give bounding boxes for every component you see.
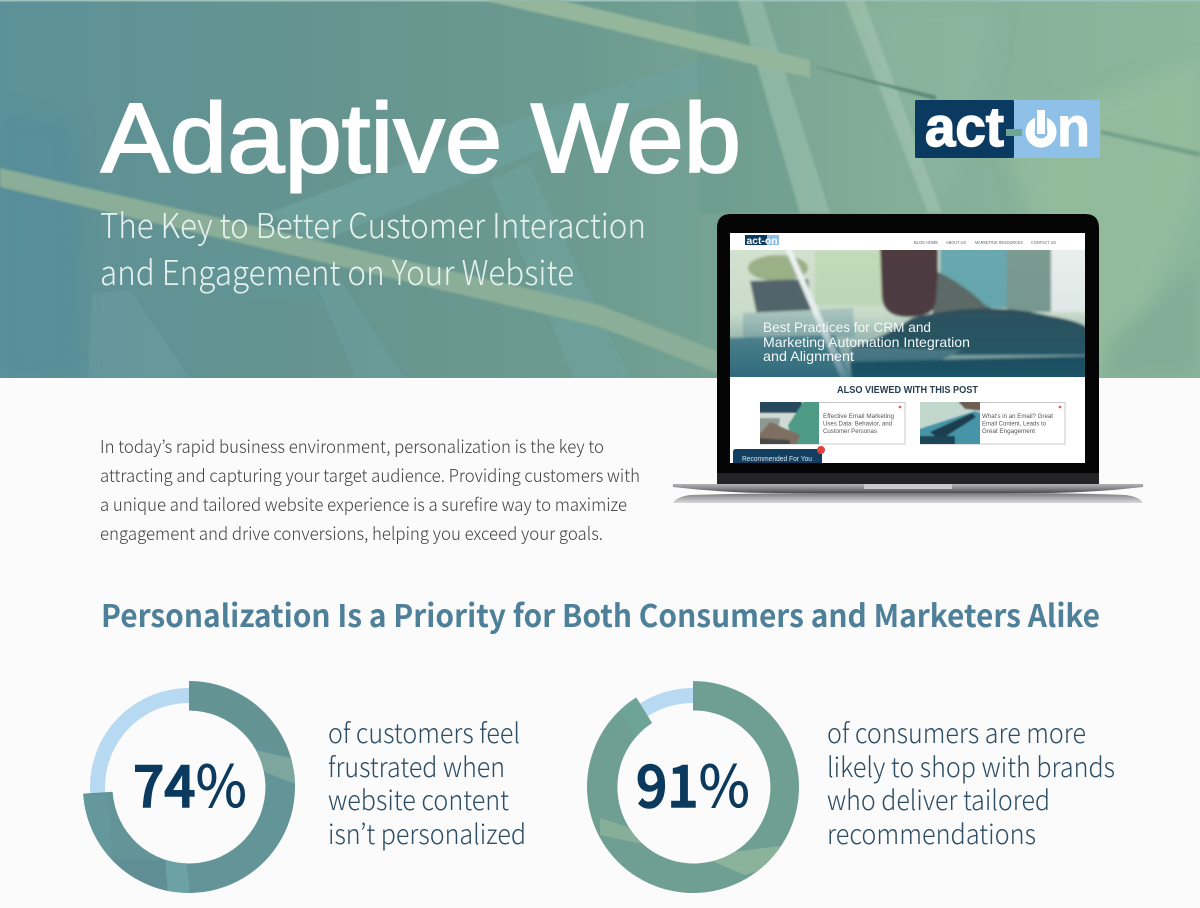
logo: act-on: n — [1057, 95, 1090, 158]
recommended tab: Recommended For You — [742, 456, 812, 463]
site nav bar: BLOG HOME — [914, 240, 938, 245]
article card 1: Effective Email Marketing — [823, 413, 894, 420]
site hero headline — [763, 319, 970, 364]
laptop mockup — [673, 214, 1143, 503]
stat text: consumers: of consumers are more — [827, 711, 1086, 751]
site content area: ALSO VIEWED WITH THIS POST — [837, 385, 978, 396]
site content area — [730, 377, 1085, 463]
intro paragraph: a unique and tailored website experience is a surefire way to maximize — [100, 492, 627, 517]
article card 1 — [760, 402, 906, 444]
intro paragraph: engagement and drive conversions, helping you exceed your goals. — [100, 521, 603, 546]
laptop reflection — [673, 493, 1143, 503]
stat text: customers — [328, 711, 526, 852]
site hero headline: Marketing Automation Integration — [763, 334, 970, 350]
stat text: customers: isn’t personalized — [328, 812, 526, 852]
title: Adaptive Web — [101, 83, 741, 193]
laptop body — [717, 214, 1099, 484]
stat text: consumers — [827, 711, 1115, 852]
intro paragraph — [100, 434, 640, 546]
site hero headline: and Alignment — [763, 348, 854, 364]
donut chart: 74% — [80, 678, 300, 898]
article card 2 — [920, 402, 1066, 444]
stat text: customers: of customers feel — [328, 711, 520, 751]
recommended tab — [733, 446, 825, 463]
article card 1: Uses Data: Behavior, and — [823, 420, 892, 428]
article card 1: Customer Personas — [823, 428, 878, 435]
article card 2: Email Content, Leads to — [982, 420, 1046, 428]
logo: act-on: act — [925, 95, 1004, 158]
stat value: 74%: 74% — [133, 740, 247, 824]
stat text: customers: frustrated when — [328, 745, 505, 785]
intro paragraph: attracting and capturing your target audience. Providing customers with — [100, 463, 640, 488]
subtitle: and Engagement on Your Website — [100, 246, 574, 295]
donut chart: 91% — [584, 678, 804, 898]
site nav bar — [730, 233, 1085, 250]
site nav bar: MARKETING RESOURCES — [975, 240, 1023, 245]
subtitle: The Key to Better Customer Interaction — [100, 199, 646, 248]
site nav bar: ABOUT US — [946, 240, 966, 245]
stat text: consumers: likely to shop with brands — [827, 745, 1115, 785]
intro paragraph: In today’s rapid business environment, personalization is the key to — [100, 434, 604, 459]
site hero headline: Best Practices for CRM and — [763, 319, 931, 335]
stat value: 91%: 91% — [636, 740, 750, 824]
article card 2: What's in an Email? Great — [982, 413, 1053, 420]
site hero image — [726, 246, 1089, 381]
laptop base — [673, 484, 1143, 493]
logo: act-on — [915, 95, 1100, 158]
site nav bar: CONTACT US — [1031, 240, 1056, 245]
stat text: customers: website content — [328, 778, 509, 818]
section heading: Personalization Is a Priority for Both Consumers and Marketers Alike — [101, 591, 1100, 636]
article card 2: Great Engagement — [982, 428, 1035, 435]
subtitle — [100, 199, 646, 295]
site nav bar: act-on — [746, 236, 778, 247]
header photo banner — [0, 0, 1200, 378]
stat text: consumers: recommendations — [827, 812, 1036, 852]
stat text: consumers: who deliver tailored — [827, 778, 1050, 818]
